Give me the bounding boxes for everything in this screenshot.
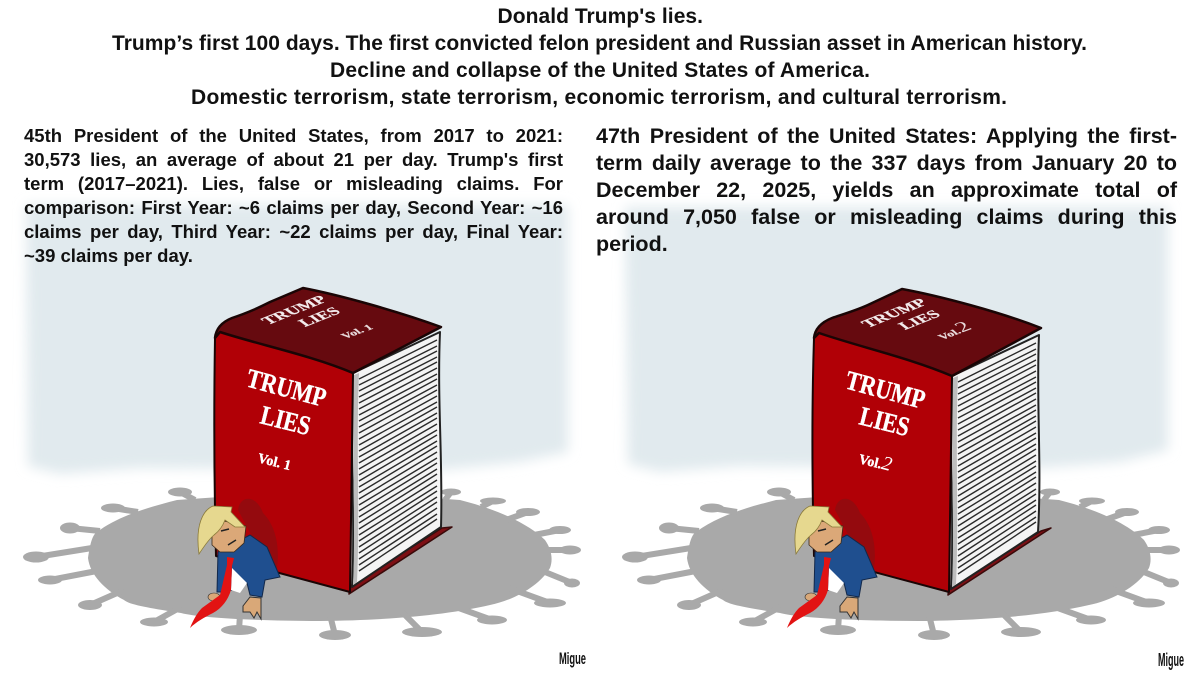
text block: 47th president: period. [596,232,668,256]
figure shadow on book [835,499,875,568]
page edge strip [353,373,359,585]
panel: right cartoon sky [625,207,1168,472]
hair [795,506,842,554]
left hand [208,593,220,601]
title: Domestic terrorism, state terrorism, economic terrorism, and cultural terrorism. [191,86,1007,109]
book front cover [812,332,952,592]
title: Decline and collapse of the United States of America. [330,59,870,82]
eye and mouth [221,529,236,545]
illustration: left virus shadow [23,488,581,640]
text block: 47th president: 47th President of the United States: Applying the first- [596,124,1177,148]
tie [190,557,234,628]
jacket [814,535,877,597]
illustration: right book: LIES [895,308,944,332]
text block: 47th president: term daily average to the 337 days from January 20 to [596,151,1177,175]
figure shadow on book [238,499,278,568]
illustration: right book [812,289,1051,595]
hair [198,506,245,554]
illustration: right figure [787,499,877,628]
illustration: left book: LIES [295,305,344,329]
text block: 45th president: 45th President of the United States, from 2017 to 2021: [24,125,563,146]
jacket [217,535,280,597]
left hand [805,593,817,601]
illustration: left figure [190,499,280,628]
title: Trump’s first 100 days. The first convicted felon president and Russian asset in American history. [112,32,1087,55]
text block: 47th president: December 22, 2025, yields an approximate total of [596,178,1177,202]
text block: 45th president: comparison: First Year: ~6 claims per day, Second Year: ~16 [24,197,563,218]
page lines [359,340,437,571]
book front cover [214,331,353,592]
signature: Migue [559,649,586,668]
book pages [951,335,1039,589]
title: Donald Trump's lies. [498,5,703,28]
book pages [352,332,441,587]
face [809,521,843,552]
panel: left cartoon sky [26,205,568,474]
tie [787,557,831,628]
illustration: right book: Vol.2 [929,318,976,343]
shirt [828,568,844,593]
illustration: left book: LIES [257,401,313,442]
top title: TRUMP [257,293,331,327]
illustration: right virus shadow [622,488,1180,640]
cover title: TRUMP [243,364,329,413]
text block: 47th president: around 7,050 false or misleading claims during this [596,205,1177,229]
illustration: right book: Vol.2 [857,447,894,476]
text block: 45th president [24,125,563,266]
right hand [840,597,858,619]
illustration: left book: Vol. 1 [256,451,292,474]
book top cover [814,289,1041,376]
top title: TRUMP [857,296,931,330]
title [112,5,1087,109]
cover title: TRUMP [842,366,928,415]
eye and mouth [818,529,833,545]
page lines [958,343,1036,574]
right hand [243,597,261,619]
book cover bottom edge [948,528,1051,595]
illustration: right book: LIES [856,402,912,443]
text block: 45th president: ~39 claims per day. [24,245,193,266]
shirt [231,568,247,593]
text block: 47th president [596,124,1178,256]
face [212,521,246,552]
book top cover [215,288,441,373]
text block: 45th president: term (2017–2021). Lies, false or misleading claims. For [24,173,563,194]
illustration: left book [214,288,452,594]
illustration: left book: Vol. 1 [339,323,376,341]
page edge strip [952,376,958,587]
text block: 45th president: claims per day, Third Year: ~22 claims per day, Final Year: [24,221,563,242]
text block: 45th president: 30,573 lies, an average of about 21 per day. Trump's first [24,149,563,170]
book cover bottom edge [349,527,452,594]
